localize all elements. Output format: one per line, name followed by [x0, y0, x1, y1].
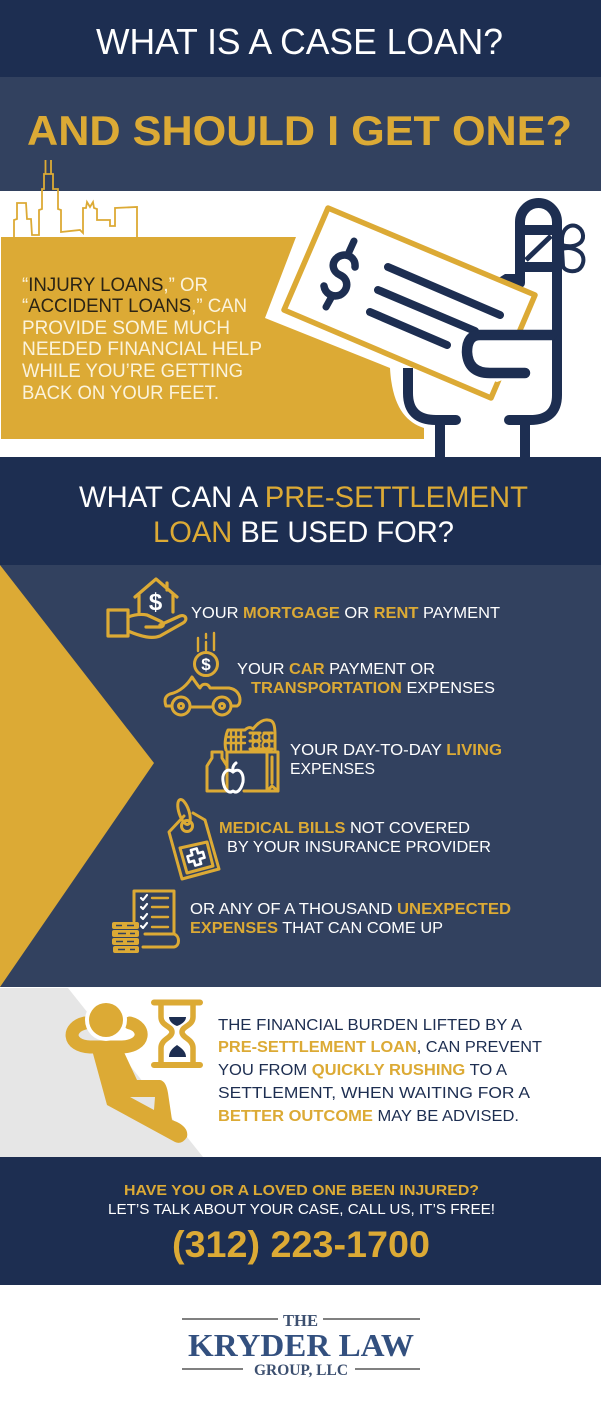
item: unexpected: OR ANY OF A THOUSAND UNEXPECTED [190, 901, 511, 918]
item: groceries: YOUR DAY-TO-DAY LIVING [290, 742, 502, 759]
intro text: WHILE YOU’RE GETTING [22, 361, 243, 382]
intro text: “ACCIDENT LOANS,” CAN [22, 296, 247, 317]
intro text [22, 275, 262, 404]
icon: grocery bag [207, 720, 278, 792]
item: medical [169, 798, 491, 879]
intro text: PROVIDE SOME MUCH [22, 318, 230, 339]
intro text: NEEDED FINANCIAL HELP [22, 339, 262, 360]
item: medical: MEDICAL BILLS NOT COVERED [219, 820, 470, 837]
panel: call to action: LET’S TALK ABOUT YOUR CASE, CALL US, IT’S FREE! [108, 1201, 495, 1218]
icon: house in hand [108, 579, 186, 637]
burden text [218, 1017, 542, 1125]
section heading [0, 457, 601, 565]
intro text: “INJURY LOANS,” OR [22, 275, 208, 296]
item: groceries [207, 720, 502, 792]
panel: intro [1, 237, 424, 439]
panel: call to action [0, 1157, 601, 1285]
panel: financial burden [0, 987, 601, 1157]
panel: call to action: (312) 223-1700 [172, 1224, 430, 1265]
burden text: SETTLEMENT, WHEN WAITING FOR A [218, 1085, 530, 1102]
logo: The Kryder Law Group: THE [283, 1311, 318, 1330]
burden text: YOU FROM QUICKLY RUSHING TO A [218, 1062, 507, 1079]
panel: call to action: HAVE YOU OR A LOVED ONE BEEN INJURED? [124, 1182, 479, 1199]
panel: uses [0, 565, 601, 987]
item: car: TRANSPORTATION EXPENSES [251, 680, 495, 697]
icon: relaxed person [72, 999, 187, 1143]
hand outline [408, 203, 583, 457]
icon: checklist and coins [112, 891, 178, 953]
logo: The Kryder Law Group: GROUP, LLC [254, 1362, 348, 1379]
item: unexpected [112, 891, 511, 953]
header: title [0, 0, 601, 77]
section heading: WHAT CAN A PRE-SETTLEMENT [79, 481, 528, 514]
header: title: WHAT IS A CASE LOAN? [96, 21, 503, 62]
item: mortgage: YOUR MORTGAGE OR RENT PAYMENT [191, 605, 501, 622]
thumb [470, 340, 552, 382]
item: car [165, 633, 495, 715]
icon: bandaged hand holding check [284, 203, 583, 457]
item: groceries: EXPENSES [290, 761, 375, 778]
icon: car and coin: $ [201, 655, 211, 674]
item: car: YOUR CAR PAYMENT OR [237, 661, 435, 678]
check lines and dollar sign [324, 241, 500, 345]
header: subtitle: AND SHOULD I GET ONE? [27, 107, 572, 154]
icon: medical tag [169, 798, 219, 879]
logo: The Kryder Law Group: KRYDER LAW [188, 1327, 414, 1363]
item: medical: BY YOUR INSURANCE PROVIDER [227, 839, 491, 856]
icon: car and coin [165, 633, 240, 715]
burden text: THE FINANCIAL BURDEN LIFTED BY A [218, 1017, 522, 1034]
item: unexpected: EXPENSES THAT CAN COME UP [190, 920, 443, 937]
burden text: PRE-SETTLEMENT LOAN , CAN PREVENT [218, 1039, 542, 1056]
header: subtitle [0, 77, 601, 191]
gold arrow [0, 565, 154, 987]
icon: hourglass [154, 1002, 200, 1065]
item: mortgage [108, 579, 501, 637]
icon: city skyline [14, 160, 137, 237]
burden text: BETTER OUTCOME MAY BE ADVISED. [218, 1108, 519, 1125]
section heading: LOAN BE USED FOR? [153, 516, 454, 549]
logo: The Kryder Law Group [182, 1311, 420, 1379]
intro text: BACK ON YOUR FEET. [22, 383, 219, 404]
icon: house in hand: $ [149, 589, 163, 616]
check [284, 208, 535, 398]
